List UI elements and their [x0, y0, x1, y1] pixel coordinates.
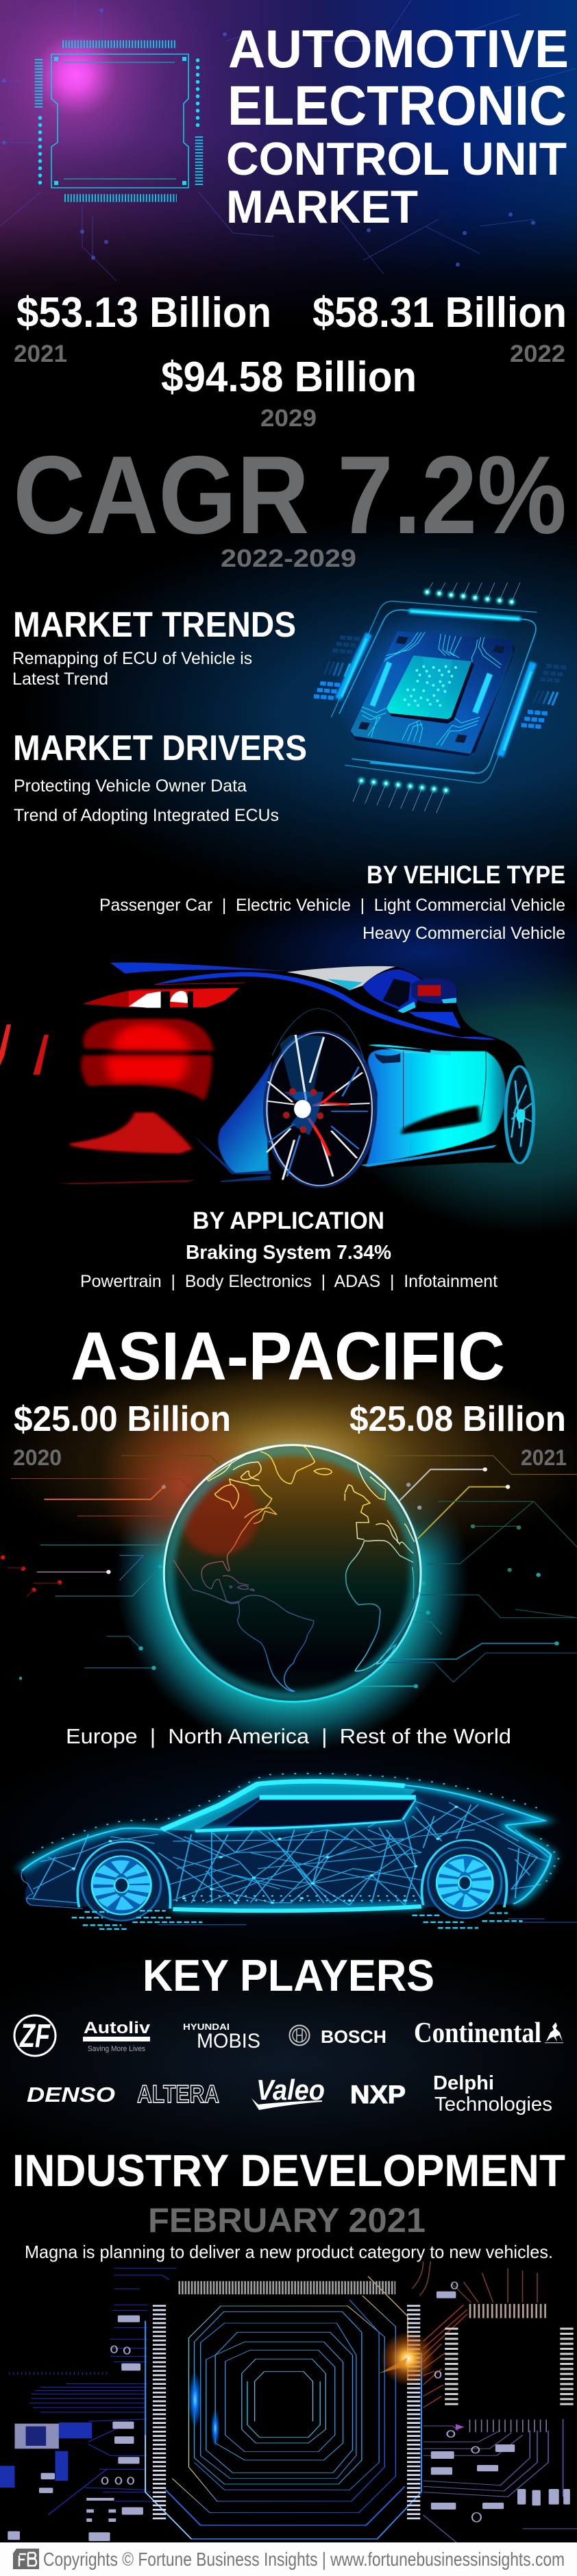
text: trends detail: Latest Trend — [12, 670, 108, 689]
panel: header background — [0, 0, 577, 322]
panel: by application — [80, 1207, 498, 1291]
octagonal rings — [145, 2277, 421, 2539]
logo: ZF: ZF — [19, 2018, 51, 2054]
text: drivers detail: Trend of Adopting Integrated ECUs — [14, 806, 279, 825]
heading: market drivers — [13, 728, 307, 825]
stat: market size figures — [14, 289, 567, 432]
mesh lines — [26, 1800, 548, 1905]
lower right traces — [423, 2419, 577, 2542]
image: sports car rear view — [0, 884, 577, 1234]
stat: Asia-Pacific heading: 2021 — [521, 1445, 567, 1470]
logo: Altera: ALTERA — [137, 2080, 219, 2108]
text: development date: FEBRUARY 2021 — [148, 2201, 426, 2240]
logo: Valeo: Valeo — [256, 2074, 325, 2106]
icon: globe with continents — [164, 1445, 421, 1702]
image: circuit board — [0, 2261, 577, 2542]
heading: market drivers: MARKET DRIVERS — [13, 728, 307, 768]
logo: Delphi Technologies — [433, 2072, 552, 2115]
stat: market size figures: $94.58 Billion — [161, 354, 417, 401]
stat: Asia-Pacific heading: $25.08 Billion — [349, 1399, 566, 1439]
logo: Bosch: BOSCH — [321, 2026, 386, 2047]
logo: Hyundai Mobis — [183, 2022, 260, 2052]
panel: by application: Braking System 7.34% — [186, 1242, 391, 1264]
text: trends detail: Remapping of ECU of Vehicle is — [12, 649, 252, 668]
logo: Continental: Continental — [414, 2017, 541, 2049]
icon: company logo — [13, 2549, 39, 2569]
solder pad rows — [160, 2287, 567, 2520]
panel: by application: BY APPLICATION — [193, 1207, 384, 1234]
stat: Asia-Pacific heading: $25.00 Billion — [14, 1399, 231, 1439]
logo: Delphi Technologies: Technologies — [434, 2094, 552, 2115]
logo: Hyundai Mobis: MOBIS — [197, 2030, 260, 2052]
footer — [0, 2542, 577, 2576]
text: other regions: Europe | North America | Rest of the World — [66, 1724, 511, 1748]
coastlines — [173, 1446, 419, 1691]
panel: key players background — [0, 1946, 577, 2179]
heading: key players: KEY PLAYERS — [143, 1950, 434, 2000]
logo: Denso: DENSO — [27, 2083, 115, 2107]
stat: Asia-Pacific heading: 2020 — [13, 1445, 62, 1470]
left traces — [9, 2268, 177, 2515]
stat: Asia-Pacific heading — [13, 1318, 567, 1470]
chart: circuit lines around globe — [1, 1456, 577, 1689]
logo: Bosch — [289, 2026, 386, 2047]
panel: by vehicle type: Heavy Commercial Vehicle — [363, 924, 565, 943]
image: wireframe neon car — [21, 1774, 577, 1929]
components — [9, 2292, 569, 2540]
logo: Hyundai Mobis: HYUNDAI — [183, 2022, 230, 2032]
panel: by vehicle type — [99, 861, 565, 943]
text: drivers detail: Protecting Vehicle Owner Data — [14, 776, 247, 796]
icon: processor chip outline — [38, 44, 199, 198]
text: development detail: Magna is planning to deliver a new product category to new vehicles. — [25, 2242, 553, 2262]
ground streaks — [72, 1911, 577, 1929]
front and rear wheels — [77, 1840, 506, 1921]
logo: Autoliv — [83, 2019, 151, 2053]
text: trends detail — [12, 649, 252, 689]
stat: CAGR: 2022-2029 — [221, 544, 356, 572]
logo: Delphi Technologies: Delphi — [433, 2072, 494, 2094]
text: drivers detail — [14, 776, 279, 825]
stat: Asia-Pacific heading: ASIA-PACIFIC — [71, 1318, 505, 1394]
glowing outline — [21, 1780, 551, 1911]
red body reflections — [81, 1019, 213, 1101]
logo: NXP: NXP — [350, 2081, 406, 2109]
panel: by application: Powertrain | Body Electronics | ADAS | Infotainment — [80, 1272, 498, 1291]
panel: chip background — [21, 514, 577, 911]
title: MARKET — [226, 181, 418, 233]
heading: market trends — [12, 605, 296, 689]
heading: market trends: MARKET TRENDS — [13, 605, 296, 645]
stat: market size figures: 2021 — [14, 341, 67, 367]
title — [226, 19, 569, 233]
title: CONTROL UNIT — [226, 133, 567, 185]
logo: Autoliv: Autoliv — [84, 2019, 151, 2037]
stat: market size figures: $53.13 Billion — [16, 289, 271, 336]
right warm traces — [412, 2261, 537, 2407]
image: globe glow background — [0, 1350, 577, 1956]
logo: Autoliv: Saving More Lives — [88, 2045, 145, 2053]
stat: market size figures: 2022 — [510, 341, 565, 367]
stat: market size figures: 2029 — [260, 405, 317, 432]
panel: by vehicle type: Passenger Car | Electric Vehicle | Light Commercial Vehicle — [99, 896, 565, 915]
title: AUTOMOTIVE — [228, 19, 569, 79]
icon: glowing processor — [314, 582, 567, 813]
stat: market size figures: $58.31 Billion — [312, 289, 567, 336]
light flares — [188, 2331, 435, 2448]
